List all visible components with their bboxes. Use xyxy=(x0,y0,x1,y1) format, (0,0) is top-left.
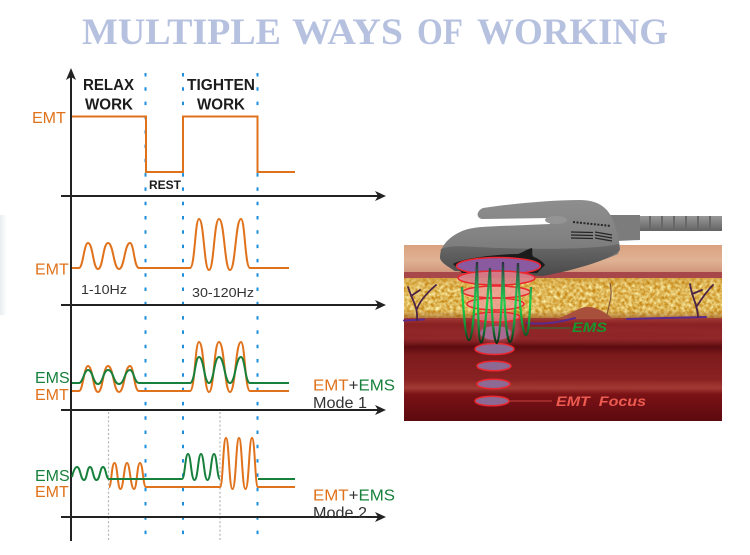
label: rest: REST xyxy=(149,178,182,192)
callout: EMS xyxy=(527,319,608,335)
row 4: mode 2 alternating waves xyxy=(35,438,395,522)
row 4: mode 2 alternating waves: EMT+EMS xyxy=(313,488,395,504)
phase divider lines xyxy=(146,73,258,541)
EMS waves xyxy=(462,262,531,343)
title: WAYS xyxy=(292,12,403,53)
row 2: EMT sine bursts: 30-120Hz xyxy=(192,285,254,300)
heading: relax work: WORK xyxy=(85,96,133,114)
heading: tighten work: WORK xyxy=(197,96,245,114)
row 3: mode 1 combined waves: EMS xyxy=(35,370,70,387)
chart: waveform timing diagram xyxy=(32,68,395,541)
heading: tighten work xyxy=(187,77,255,114)
row 4: mode 2 alternating waves: Mode 2 xyxy=(313,505,367,522)
row 3: mode 1 combined waves: Mode 1 xyxy=(313,395,367,412)
row 4: mode 2 alternating waves: EMS xyxy=(35,468,70,485)
title xyxy=(82,12,668,53)
row 3: mode 1 combined waves: EMT xyxy=(35,387,69,404)
row 3: mode 1 combined waves: EMT+EMS xyxy=(313,378,395,394)
heading: tighten work: TIGHTEN xyxy=(187,77,255,94)
title: MULTIPLE xyxy=(82,12,281,53)
tissue layers xyxy=(404,245,722,421)
row 2: EMT sine bursts: 1-10Hz xyxy=(81,282,127,297)
row 4: mode 2 alternating waves: EMT xyxy=(35,484,69,501)
title: OF xyxy=(417,12,463,53)
callout: EMT focus: EMT Focus xyxy=(556,393,646,409)
row 1: EMT square wave xyxy=(32,110,295,172)
callout: EMS: EMS xyxy=(572,319,608,335)
nerve strands xyxy=(404,283,713,324)
axes xyxy=(61,68,386,541)
EMT focus rings xyxy=(456,258,540,406)
row 2: EMT sine bursts: EMT xyxy=(35,262,69,278)
handpiece body xyxy=(440,200,620,276)
title: WORKING xyxy=(477,12,668,53)
illustration: handpiece on tissue cross-section xyxy=(404,200,722,421)
row 2: EMT sine bursts xyxy=(35,219,289,300)
row 1: EMT square wave: EMT xyxy=(32,110,66,127)
callout: EMT focus xyxy=(509,393,646,409)
row 3: mode 1 combined waves xyxy=(35,342,395,412)
heading: relax work xyxy=(83,77,134,114)
heading: relax work: RELAX xyxy=(83,77,134,94)
cable xyxy=(610,215,722,241)
vent slots xyxy=(571,222,612,241)
mode 2 time split lines xyxy=(108,412,220,541)
